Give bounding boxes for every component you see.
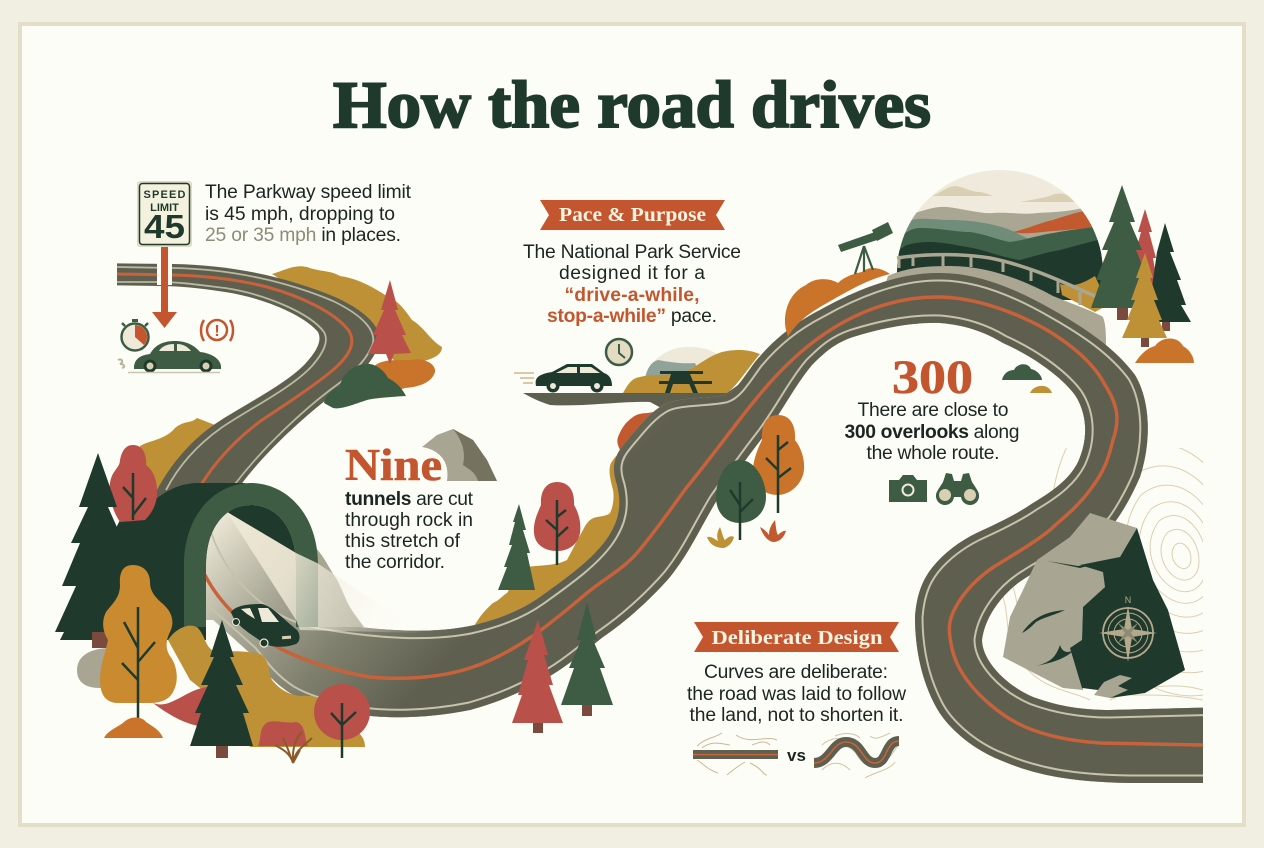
- road: lower and right sections: [190, 273, 1230, 783]
- Deliberate Design text: the road was laid to follow: [687, 684, 906, 705]
- icon: beetle car: [118, 341, 221, 372]
- Pace & Purpose text: designed it for a: [559, 263, 705, 284]
- pines at bridge: [1091, 185, 1194, 363]
- orange shrub by overlook: [617, 412, 665, 454]
- mid-road shrubs and trees: [498, 415, 804, 733]
- Nine callout: the corridor.: [345, 552, 445, 573]
- bushes behind upper road: [140, 266, 442, 500]
- 300 overlooks callout: 300: [892, 351, 973, 404]
- contour map lines: [1002, 448, 1203, 700]
- speed limit text: 25 or 35 mph in places.: [205, 225, 401, 246]
- Deliberate Design text: [687, 662, 906, 726]
- speed sign with arrow: [137, 181, 192, 328]
- straight vs curved road comparison: [693, 733, 899, 778]
- scenic overlook spur: [523, 380, 745, 412]
- tunnel: [60, 483, 423, 640]
- ochre hillside left of road: [472, 452, 640, 640]
- road: upper section: [117, 263, 377, 524]
- speed sign with arrow: LIMIT: [150, 202, 179, 214]
- Deliberate Design banner: Deliberate Design: [712, 627, 882, 649]
- stone bridge parapet and railing: [880, 255, 1106, 348]
- overlook hill and picnic table: [623, 347, 760, 395]
- Deliberate Design banner: [694, 622, 899, 652]
- speed limit text: The Parkway speed limit: [205, 182, 412, 203]
- icon: stopwatch: [122, 319, 148, 350]
- Pace & Purpose text: The National Park Service: [523, 242, 741, 263]
- title: How the road drives: [333, 68, 931, 142]
- 300 overlooks callout: There are close to: [858, 400, 1008, 421]
- speed limit text: [205, 182, 412, 246]
- tunnel car: [231, 604, 300, 647]
- Nine callout: tunnels are cut: [345, 489, 474, 510]
- mountain vista: [890, 165, 1110, 300]
- straight vs curved road comparison: vs: [787, 746, 806, 765]
- icon: camera: [889, 475, 927, 502]
- icon: binoculars: [936, 473, 979, 505]
- 300 overlooks callout: the whole route.: [866, 443, 1000, 464]
- Nine callout: [345, 440, 474, 573]
- rock with compass: N: [1125, 595, 1131, 605]
- icon: small shrub and mound: [1002, 364, 1052, 393]
- icon: telescope: [838, 222, 893, 274]
- 300 overlooks callout: 300 overlooks along: [844, 422, 1020, 443]
- speed sign with arrow: 45: [144, 208, 185, 245]
- icon: brake warning: !: [214, 323, 220, 340]
- speed limit text: is 45 mph, dropping to: [205, 204, 395, 225]
- Nine callout: through rock in: [345, 510, 473, 531]
- Pace & Purpose text: [523, 242, 741, 327]
- icon: orange shrubs under telescope: [785, 268, 890, 337]
- tree cluster: bottom left: [55, 445, 370, 763]
- icon: brake warning: [201, 320, 233, 341]
- Pace & Purpose text: stop-a-while” pace.: [547, 306, 717, 327]
- 300 overlooks callout: [844, 351, 1020, 464]
- rock behind Nine: [422, 429, 497, 481]
- Pace & Purpose banner: Pace & Purpose: [559, 204, 706, 226]
- Nine callout: Nine: [345, 440, 442, 490]
- Pace & Purpose banner: [540, 200, 725, 230]
- Nine callout: this stretch of: [345, 531, 461, 552]
- rock with compass: [1003, 513, 1185, 698]
- icon: sedan on overlook: [514, 364, 612, 392]
- Deliberate Design text: the land, not to shorten it.: [690, 705, 904, 726]
- rock behind tunnel: [316, 548, 364, 627]
- Deliberate Design text: Curves are deliberate:: [704, 662, 888, 683]
- ochre shrub behind railing: [1060, 276, 1108, 312]
- speed sign with arrow: SPEED: [144, 189, 186, 201]
- shrub and pine at upper bend: [324, 280, 411, 408]
- Pace & Purpose text: “drive-a-while,: [564, 285, 700, 306]
- icon: clock: [606, 339, 632, 365]
